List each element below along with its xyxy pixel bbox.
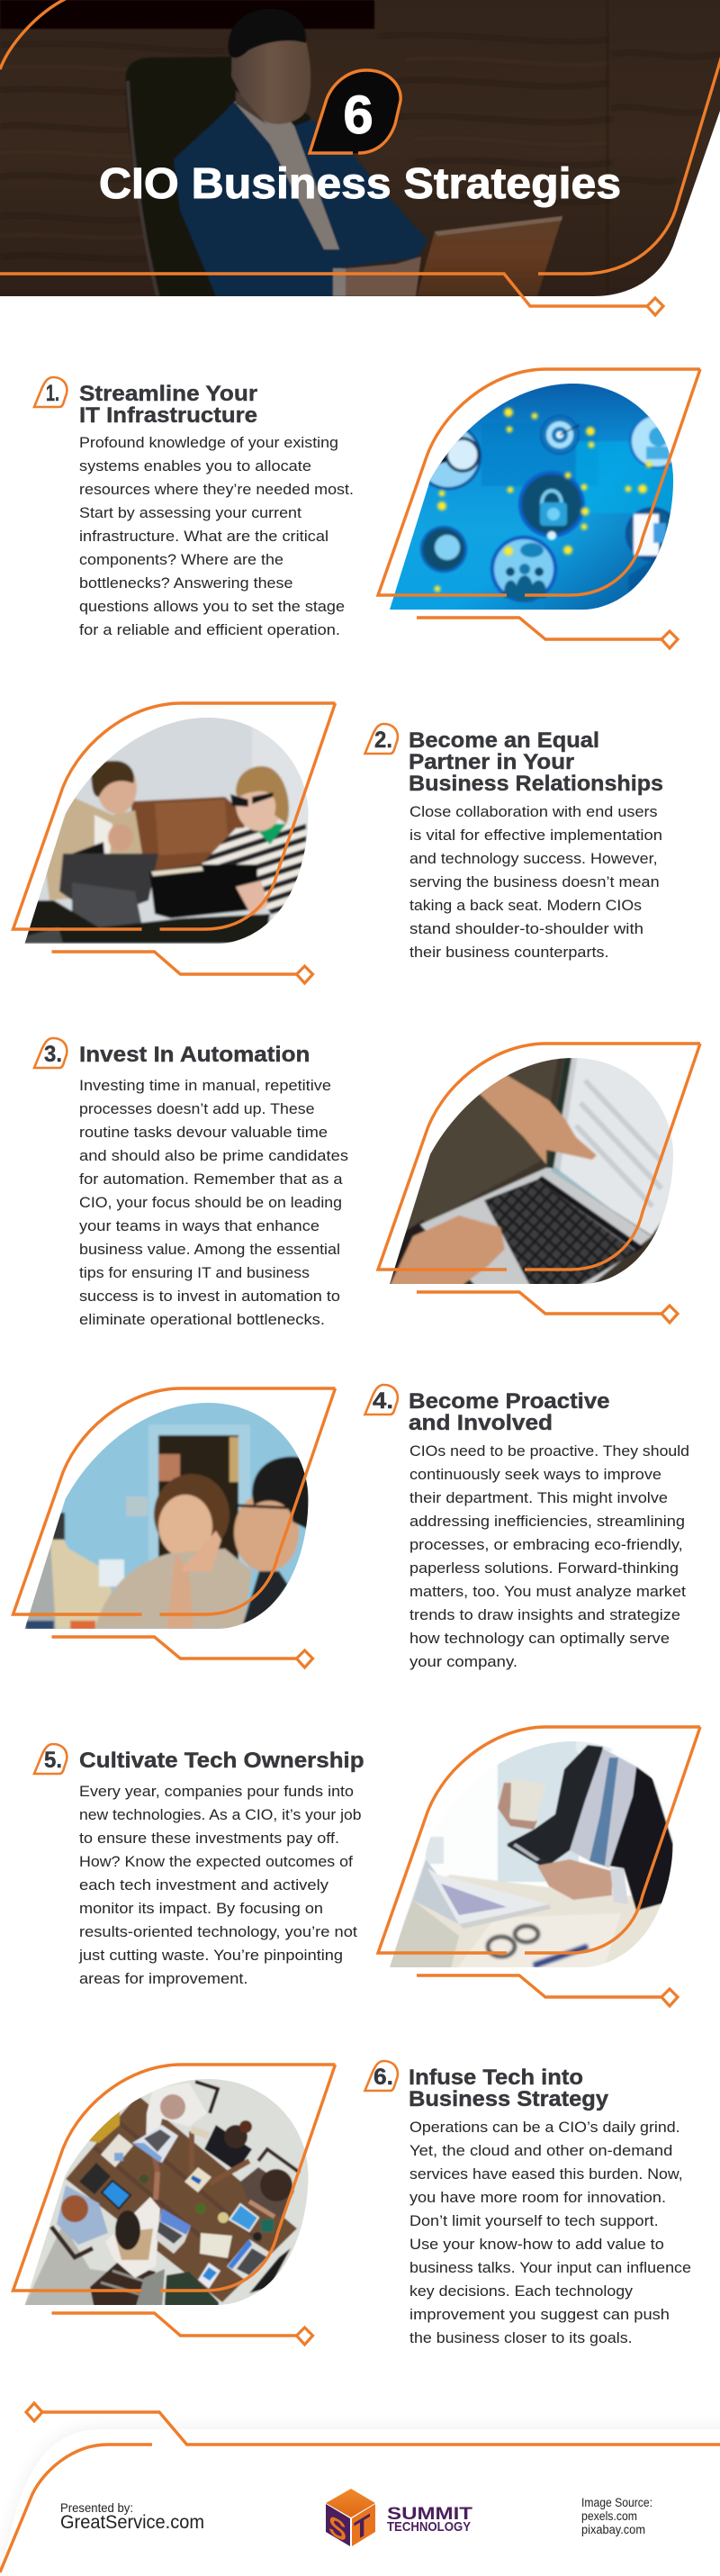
section 2 photo frame	[13, 703, 335, 929]
section 4 body text: CIOs need to be proactive. They should	[410, 1442, 689, 1460]
section 5 heading: Cultivate Tech Ownership	[79, 1749, 364, 1773]
section 4 body text: your company.	[410, 1653, 518, 1670]
title: CIO Business Strategies	[99, 160, 621, 208]
section 3 body text: and should also be prime candidates	[79, 1147, 348, 1164]
section 2 body text: serving the business doesn’t mean	[410, 873, 660, 890]
presented by: GreatService.com	[60, 2512, 204, 2533]
section 1 number badge: 1.	[46, 381, 59, 406]
shirt	[570, 1749, 636, 1868]
section 5 photo: businessman with coffee and phone	[387, 1738, 680, 1972]
section 4 number badge	[365, 1385, 398, 1415]
section 3 body text: CIO, your focus should be on leading	[79, 1194, 342, 1211]
section 6 body text: Yet, the cloud and other on-demand	[410, 2142, 672, 2159]
section 1 body text: bottlenecks? Answering these	[79, 574, 293, 592]
section 6 heading: Infuse Tech into	[409, 2065, 583, 2090]
section 4 heading	[409, 1389, 610, 1435]
section 6 number badge	[365, 2061, 398, 2091]
section 2 connector with diamond	[52, 952, 313, 983]
logo cube: S	[328, 2508, 346, 2549]
section 1 body text: questions allows you to set the stage	[79, 598, 345, 615]
section 3 number badge	[34, 1038, 67, 1068]
section 6 body text: services have eased this burden. Now,	[410, 2165, 683, 2183]
section 5 body text: each tech investment and actively	[79, 1876, 329, 1894]
bottom chair	[90, 2263, 156, 2309]
cup	[510, 1778, 546, 1821]
footer panel	[0, 2403, 720, 2576]
footer connector with diamond	[26, 2403, 720, 2445]
section 4 connector with diamond	[52, 1637, 313, 1668]
hair	[229, 9, 306, 58]
section 5 body text: new technologies. As a CIO, it’s your job	[79, 1806, 362, 1823]
cuff	[610, 1868, 628, 1904]
header number badge	[310, 70, 400, 153]
section 6 photo: team meeting from above	[25, 2079, 308, 2305]
image source: pexels.com	[581, 2509, 637, 2523]
header connector with diamond	[0, 274, 663, 315]
section 6 photo frame	[13, 2065, 335, 2291]
section 6 body text: key decisions. Each technology	[410, 2282, 634, 2300]
lower right laptop	[227, 2239, 272, 2285]
section 4 body text: trends to draw insights and strategize	[410, 1606, 680, 1623]
section 2 panel	[13, 703, 663, 983]
section 2 heading: Partner in Your	[409, 750, 574, 774]
section 1 body text: resources where they’re needed most.	[79, 481, 354, 498]
small book	[184, 2167, 212, 2192]
black tablet	[79, 2163, 111, 2194]
section 4 body text: how technology can optimally serve	[410, 1630, 670, 1647]
footer soft shadow shape	[0, 2427, 720, 2576]
dark right person	[249, 2248, 291, 2293]
section 5 number badge: 5.	[44, 1748, 62, 1773]
section 6 panel	[13, 2061, 691, 2346]
logo: Summit Technology: SUMMIT	[387, 2505, 472, 2524]
section 1 panel	[34, 369, 700, 648]
table	[66, 2095, 297, 2302]
section 2 number badge	[365, 724, 398, 754]
tie	[590, 1758, 618, 1866]
section 1 heading	[79, 382, 257, 428]
section 6 body text: you have more room for innovation.	[410, 2189, 666, 2206]
section 6 connector with diamond	[52, 2313, 313, 2345]
section 4 photo: man and woman at monitor	[25, 1403, 308, 1629]
section 6 body text: improvement you suggest can push	[410, 2306, 670, 2323]
section 5 connector with diamond	[417, 1975, 678, 2006]
section 2 body text: their business counterparts.	[410, 944, 608, 961]
section 5 body text: Every year, companies pour funds into	[79, 1783, 354, 1800]
laptop centre	[156, 2209, 191, 2254]
hand	[537, 1859, 612, 1900]
bottom green person	[165, 2272, 219, 2309]
section 1 body text	[79, 434, 354, 638]
presented by	[60, 2500, 204, 2533]
section 1 body text: systems enables you to allocate	[79, 457, 311, 475]
section 3 body text	[79, 1077, 348, 1328]
section 2 number badge: 2.	[374, 728, 392, 753]
section 4 number badge: 4.	[373, 1388, 393, 1414]
suit left	[507, 1745, 603, 1864]
laptops at top	[101, 2134, 133, 2167]
section 6 body text: Operations can be a CIO’s daily grind.	[410, 2119, 680, 2136]
right top person	[204, 2125, 252, 2172]
section 4 body text	[410, 1442, 689, 1670]
section 4 body text: continuously seek ways to improve	[410, 1466, 662, 1483]
image source: pixabay.com	[581, 2523, 645, 2536]
section 4 body text: their department. This might involve	[410, 1489, 668, 1506]
section 5 number badge	[34, 1744, 67, 1774]
section 5 body text: just cutting waste. You’re pinpointing	[78, 1947, 343, 1964]
section 2 heading: Business Relationships	[409, 772, 663, 796]
right tablet	[230, 2204, 258, 2231]
glowing yellow dots	[434, 408, 652, 592]
section 2 body text: stand shoulder-to-shoulder with	[410, 920, 644, 937]
section 4 body text: processes, or embracing eco-friendly,	[410, 1536, 683, 1553]
section 1 body text: infrastructure. What are the critical	[79, 528, 328, 545]
section 4 body text: addressing inefficiencies, streamlining	[410, 1513, 685, 1530]
section 4 photo frame	[13, 1388, 335, 1614]
blue tablet	[102, 2181, 130, 2209]
section 3 body text: tips for ensuring IT and business	[79, 1264, 310, 1281]
small table items	[195, 2203, 206, 2214]
section 1 number badge	[34, 377, 67, 407]
standing man	[145, 2083, 207, 2135]
section 2 body text: and technology success. However,	[410, 850, 658, 867]
section 1 body text: components? Where are the	[79, 551, 284, 568]
cuff and hand	[333, 268, 347, 296]
section 4 heading: Become Proactive	[409, 1389, 610, 1414]
section 6 body text: business talks. Your input can influence	[410, 2259, 691, 2276]
phone	[506, 1844, 550, 1866]
section 2 body text: Close collaboration with end users	[410, 803, 658, 820]
section 3 body text: your teams in ways that enhance	[79, 1217, 320, 1234]
section 1 heading: IT Infrastructure	[79, 403, 257, 428]
small tablet	[198, 2263, 220, 2289]
section 4 body text: paperless solutions. Forward-thinking	[410, 1559, 679, 1577]
logo: Summit Technology	[326, 2489, 472, 2549]
section 3 body text: eliminate operational bottlenecks.	[79, 1311, 325, 1328]
section 3 body text: for automation. Remember that as a	[79, 1170, 343, 1188]
section 1 connector with diamond	[417, 618, 678, 648]
section 5 photo frame	[378, 1727, 700, 1953]
header banner: darkened office photo	[0, 0, 720, 296]
section 6 heading	[409, 2065, 609, 2111]
image source	[581, 2496, 652, 2536]
section 4 heading: and Involved	[409, 1411, 553, 1435]
section 3 panel	[34, 1038, 700, 1328]
section 3 photo frame	[378, 1044, 700, 1270]
section 1 photo: blue tech icons	[387, 378, 685, 612]
section 4 panel	[13, 1385, 689, 1670]
notebook	[200, 2233, 232, 2258]
section 2 heading: Become an Equal	[409, 728, 599, 753]
logo cube	[326, 2489, 375, 2549]
section 5 body text: monitor its impact. By focusing on	[79, 1900, 323, 1917]
yellow sweater person	[88, 2111, 121, 2144]
section 6 body text	[410, 2119, 691, 2346]
section 6 number badge: 6.	[374, 2065, 393, 2090]
left person	[57, 2185, 108, 2245]
section 1 body text: for a reliable and efficient operation.	[79, 621, 340, 638]
section 5 body text: to ensure these investments pay off.	[79, 1830, 339, 1847]
section 3 body text: business value. Among the essential	[79, 1241, 340, 1258]
laptop	[417, 216, 562, 296]
section 6 body text: Use your know-how to add value to	[410, 2236, 664, 2253]
section 1 heading: Streamline Your	[79, 382, 257, 406]
footer curved line	[0, 2445, 152, 2572]
section 1 body text: Start by assessing your current	[79, 504, 302, 521]
section 1 body text: Profound knowledge of your existing	[79, 434, 338, 451]
section 5 body text: How? Know the expected outcomes of	[79, 1853, 353, 1870]
header decorative line: right curve	[538, 56, 720, 274]
section 6 body text: the business closer to its goals.	[410, 2329, 633, 2346]
table	[387, 1875, 666, 1972]
section 3 body text: routine tasks devour valuable time	[79, 1124, 328, 1141]
logo cube: T	[354, 2508, 370, 2547]
section 3 body text: processes doesn’t add up. These	[79, 1100, 315, 1117]
handshake woman	[105, 2197, 160, 2278]
section 2 body text: taking a back seat. Modern CIOs	[410, 897, 642, 914]
section 3 connector with diamond	[417, 1292, 678, 1323]
section 2 photo: two colleagues	[25, 718, 308, 944]
section 6 heading: Business Strategy	[409, 2087, 609, 2111]
header number badge: 6	[343, 85, 374, 145]
hand on cup	[498, 1783, 537, 1830]
header decorative line: top left	[0, 0, 67, 69]
section 3 body text: Investing time in manual, repetitive	[79, 1077, 331, 1094]
section 3 body text: success is to invest in automation to	[79, 1288, 340, 1305]
curly haired person	[258, 2149, 300, 2173]
section 3 heading: Invest In Automation	[79, 1043, 310, 1067]
section 5 body text: results-oriented technology, you’re not	[79, 1923, 357, 1940]
section 5 body text	[78, 1783, 362, 1987]
suit right	[606, 1767, 673, 1911]
presented by: Presented by:	[60, 2500, 133, 2515]
section 2 body text: is vital for effective implementation	[410, 827, 662, 844]
suit	[174, 102, 428, 296]
section 5 panel	[34, 1727, 700, 2006]
section 1 photo frame	[378, 369, 700, 595]
section 5 body text: areas for improvement.	[79, 1970, 248, 1987]
logo: Summit Technology: TECHNOLOGY	[387, 2519, 471, 2535]
top chair	[195, 2082, 218, 2113]
wall screen	[0, 0, 374, 29]
chair	[126, 57, 310, 296]
section 3 photo: hands on laptop	[387, 1053, 680, 1288]
section 6 body text: Don’t limit yourself to tech support.	[410, 2212, 659, 2229]
shirt	[234, 97, 339, 249]
section 4 body text: matters, too. You must analyze market	[410, 1583, 686, 1600]
section 2 heading	[409, 728, 663, 796]
face	[231, 41, 310, 124]
image source: Image Source:	[581, 2496, 652, 2509]
section 3 number badge: 3.	[44, 1042, 62, 1067]
laptop	[412, 1859, 459, 1924]
section 2 body text	[410, 803, 662, 961]
